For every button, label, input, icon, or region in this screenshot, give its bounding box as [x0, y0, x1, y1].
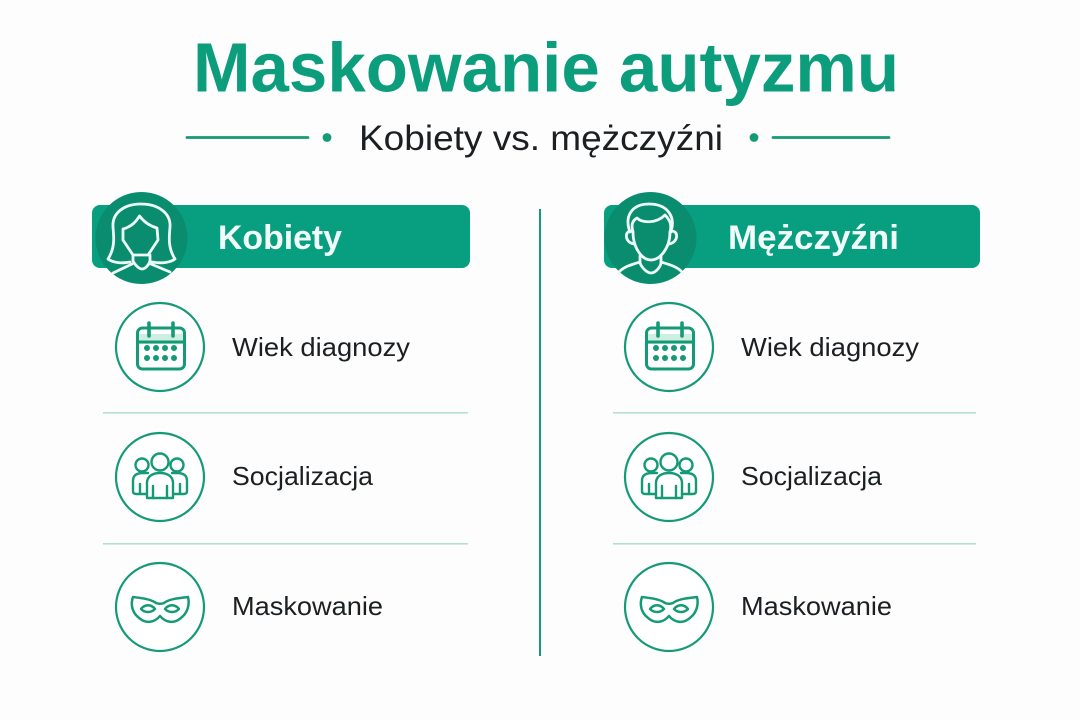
icon: man: [604, 192, 696, 284]
title: Maskowanie autyzmu: [193, 28, 899, 106]
row: Wiek diagnozy: Wiek diagnozy: [741, 332, 919, 362]
header: Mężczyźni: [604, 192, 980, 284]
row: Socjalizacja: [116, 433, 374, 521]
row: Maskowanie: [116, 563, 383, 651]
row: Maskowanie: Maskowanie: [232, 591, 383, 621]
row: Maskowanie: Maskowanie: [741, 591, 892, 621]
icon: woman: [96, 192, 188, 284]
panel: Kobiety: [92, 192, 470, 651]
subtitle with decorative rules: Kobiety vs. mężczyźni: [359, 119, 723, 158]
subtitle with decorative rules: [187, 119, 889, 158]
center divider: [539, 209, 541, 656]
row: Socjalizacja: Socjalizacja: [232, 461, 374, 491]
row: Wiek diagnozy: [625, 303, 919, 391]
row: Maskowanie: [625, 563, 892, 651]
row: Socjalizacja: Socjalizacja: [741, 461, 883, 491]
row: Socjalizacja: [625, 433, 883, 521]
row: Wiek diagnozy: Wiek diagnozy: [232, 332, 410, 362]
header: Kobiety: [92, 192, 470, 284]
panel: Mężczyźni: [604, 192, 980, 651]
header: Mężczyźni: Mężczyźni: [728, 219, 899, 257]
row: Wiek diagnozy: [116, 303, 410, 391]
header: Kobiety: Kobiety: [218, 219, 342, 257]
